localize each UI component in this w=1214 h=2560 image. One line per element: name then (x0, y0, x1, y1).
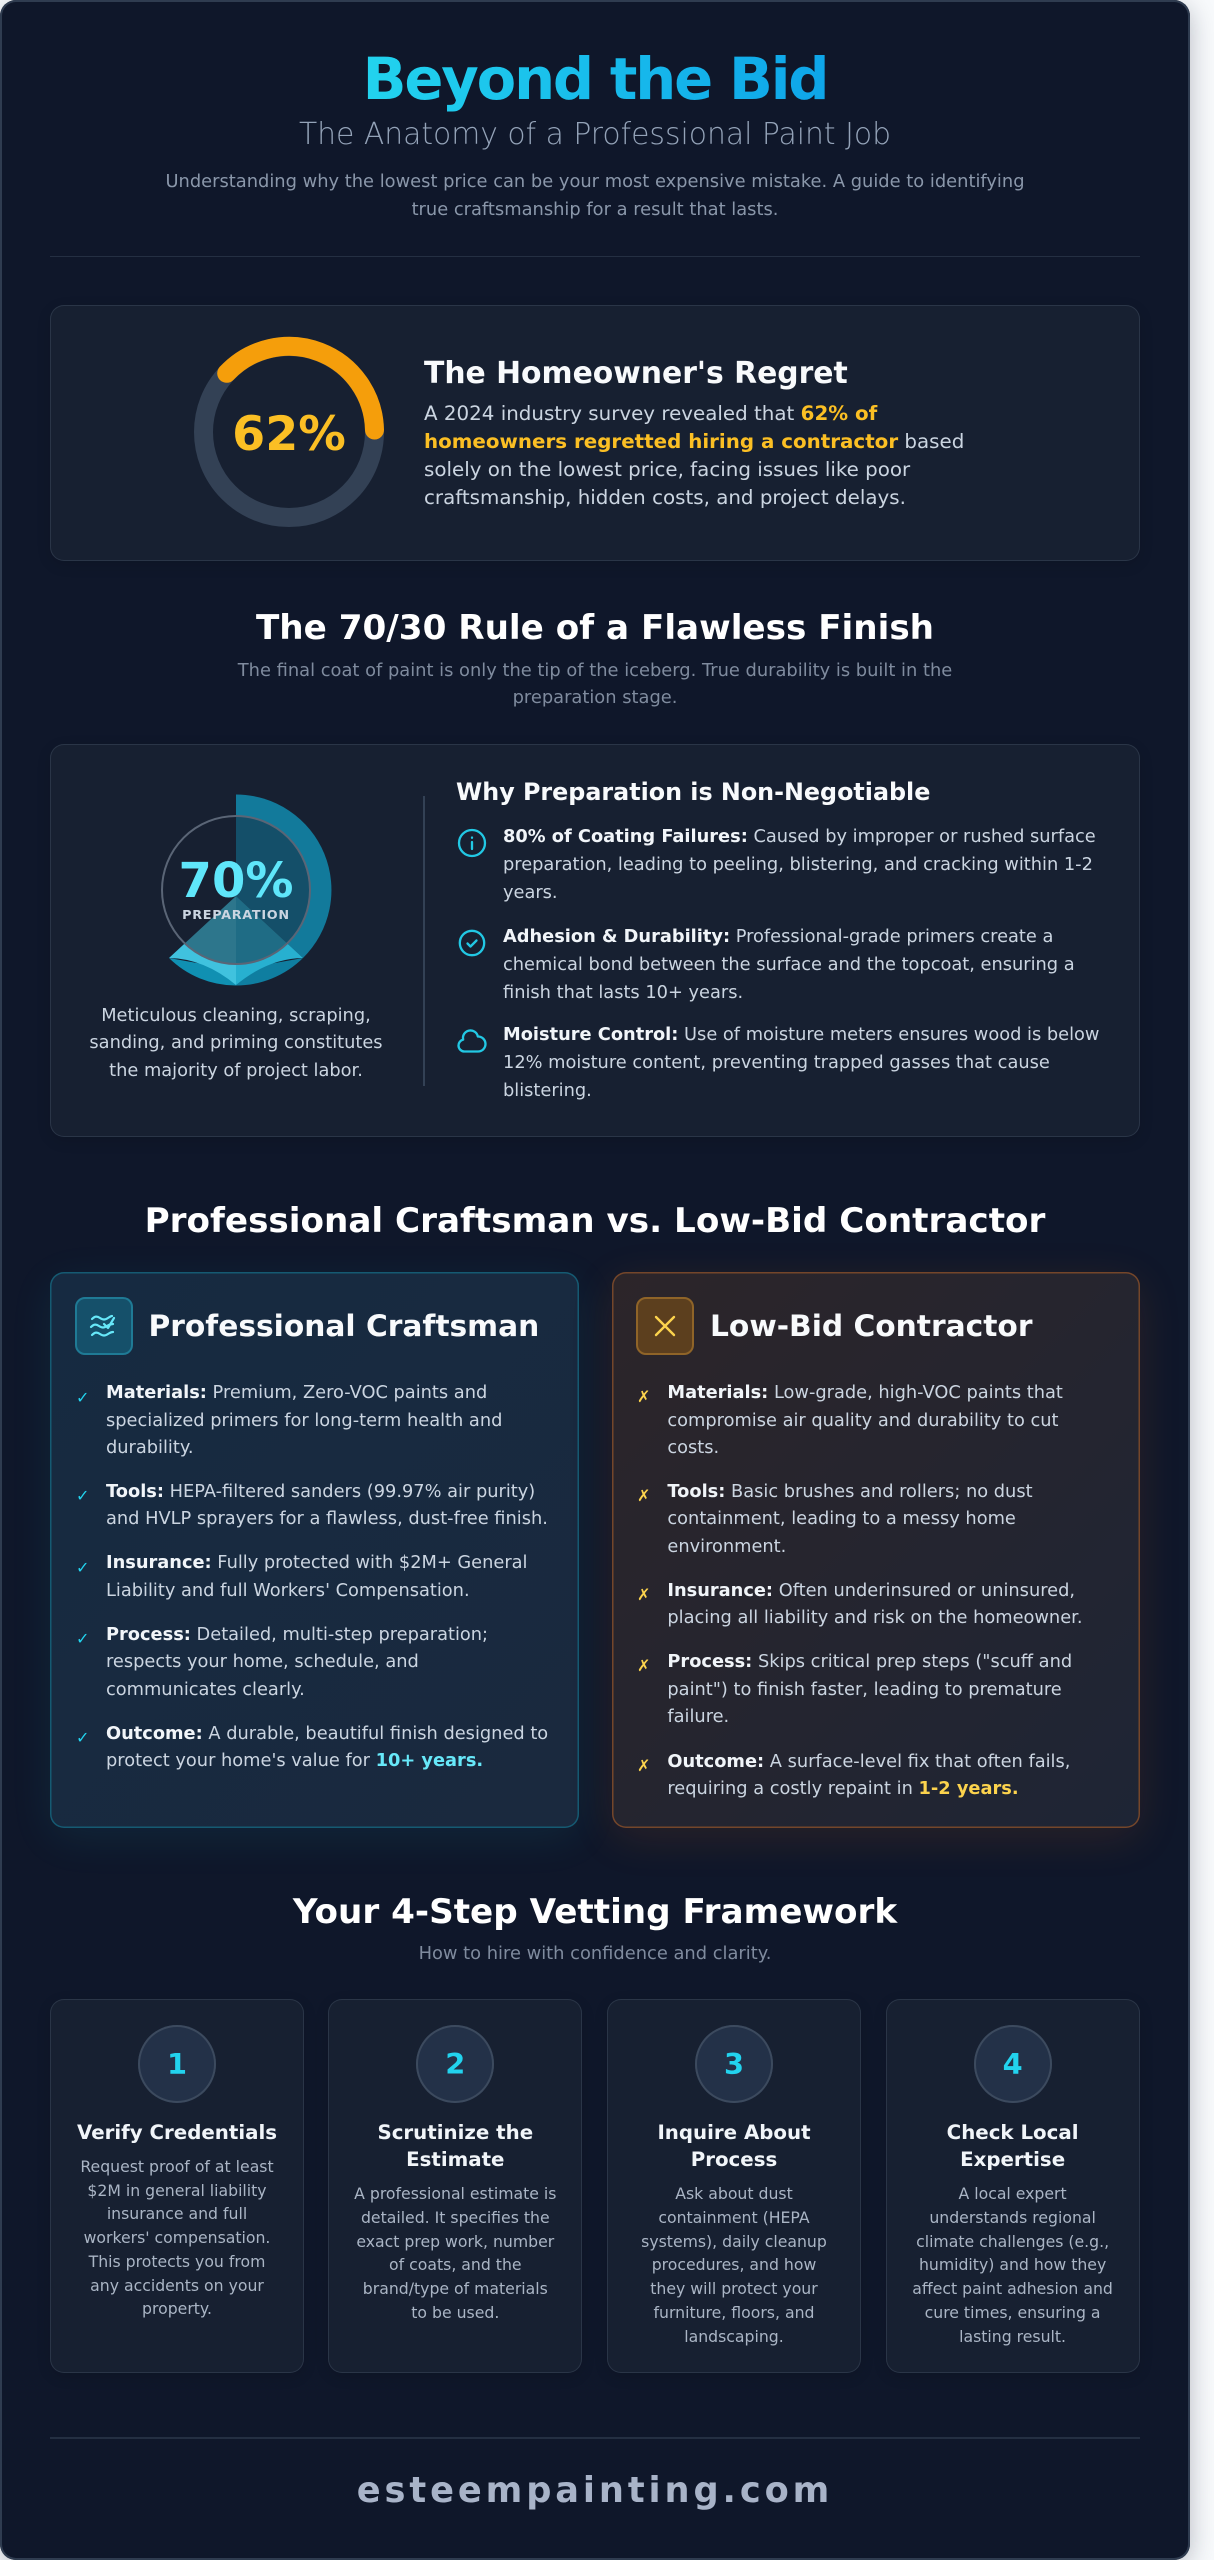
chart: 70% preparation: 70% (179, 853, 293, 909)
step text: to be used. (411, 2303, 499, 2322)
cross mark: ✗ (637, 1486, 650, 1505)
step title: Estimate (406, 2148, 504, 2171)
item: tools: containment, leading to a messy home (667, 1508, 1016, 1529)
subheading (238, 660, 952, 708)
item: outcome: Outcome: A surface-level fix that often fails, (667, 1750, 1070, 1772)
step text: A local expert (959, 2184, 1067, 2203)
step number: 3 (724, 2047, 744, 2081)
item: materials: compromise air quality and durability to cut (667, 1410, 1058, 1431)
step number (695, 2025, 773, 2103)
item: process (667, 1651, 1072, 1727)
item: tools (667, 1481, 1033, 1557)
item: process: respects your home, schedule, and (106, 1651, 419, 1672)
item: process: Process: Detailed, multi-step preparation; (106, 1624, 488, 1645)
step text: procedures, and how (652, 2255, 816, 2274)
step text: Request proof of at least (80, 2157, 274, 2176)
step card 1 (50, 1999, 304, 2373)
item: materials: costs. (667, 1437, 719, 1458)
step text: systems), daily cleanup (641, 2232, 827, 2251)
item: moisture (503, 1024, 1099, 1101)
card heading: Low-Bid Contractor (710, 1309, 1032, 1344)
donut chart: 62%: 62% (232, 407, 346, 462)
item: coating failures: 80% of Coating Failures: Caused by improper or rushed surface (503, 826, 1096, 847)
item: insurance: Liability and full Workers' Compensation. (106, 1580, 470, 1601)
step title: Inquire About (657, 2120, 811, 2144)
item: moisture: blistering. (503, 1080, 592, 1101)
header (50, 46, 1140, 257)
body text (424, 402, 964, 509)
item: outcome: protect your home's value for 10+ years. (106, 1750, 483, 1771)
step number (138, 2025, 216, 2103)
step number: 2 (445, 2047, 465, 2081)
step text: climate challenges (e.g., (916, 2232, 1109, 2251)
cross mark: ✗ (637, 1585, 650, 1604)
item: moisture: Moisture Control: Use of moisture meters ensures wood is below (503, 1024, 1099, 1045)
step text: A professional estimate is (354, 2184, 556, 2203)
chart: 70% preparation (161, 794, 332, 986)
step text: of coats, and the (389, 2255, 522, 2274)
heading: The 70/30 Rule of a Flawless Finish (256, 608, 934, 648)
step text: $2M in general liability (87, 2181, 267, 2200)
item: tools: Tools: Basic brushes and rollers; no dust (667, 1481, 1033, 1502)
step number: 1 (167, 2047, 187, 2081)
panel: homeowner's regret (50, 305, 1140, 561)
section heading: vetting framework (292, 1892, 898, 1964)
section heading: comparison: Professional Craftsman vs. Low-Bid Contractor (145, 1201, 1045, 1241)
item: process: failure. (667, 1706, 729, 1727)
subheading: How to hire with confidence and clarity. (419, 1943, 771, 1964)
section heading: 70/30 rule (238, 608, 952, 708)
intro text: true craftsmanship for a result that lasts. (412, 199, 778, 220)
intro text (165, 171, 1025, 220)
item: insurance (667, 1580, 1082, 1628)
panel: low-bid contractor (612, 1272, 1140, 1828)
list: low-bid (637, 1382, 1082, 1799)
icon: cloud (457, 1029, 487, 1053)
step text: lasting result. (959, 2327, 1066, 2346)
item: moisture: 12% moisture content, preventing trapped gasses that cause (503, 1052, 1050, 1073)
item: materials: specialized primers for long-term health and (106, 1410, 502, 1431)
chart caption: Meticulous cleaning, scraping, (101, 1005, 371, 1026)
panel: professional craftsman (50, 1272, 578, 1828)
step text (912, 2184, 1113, 2346)
body text: homeowners regretted hiring a contractor based (424, 430, 964, 453)
intro text: Understanding why the lowest price can be your most expensive mistake. A guide to identifying (165, 171, 1025, 192)
body text: craftsmanship, hidden costs, and project delays. (424, 486, 906, 509)
step text: brand/type of materials (363, 2279, 548, 2298)
item: process: paint") to finish faster, leading to premature (667, 1679, 1062, 1700)
step title (377, 2120, 533, 2171)
step text: detailed. It specifies the (361, 2208, 550, 2227)
check mark: ✓ (76, 1558, 89, 1577)
cross mark: ✗ (637, 1387, 650, 1406)
step text: affect paint adhesion and (912, 2279, 1113, 2298)
step number (416, 2025, 494, 2103)
step number (974, 2025, 1052, 2103)
step title (657, 2120, 811, 2171)
check mark: ✓ (76, 1728, 89, 1747)
step text: exact prep work, number (356, 2232, 554, 2251)
item: process (106, 1624, 488, 1700)
cross mark: ✗ (637, 1756, 650, 1774)
chart caption (89, 1005, 383, 1081)
item: insurance: Insurance: Fully protected with $2M+ General (106, 1552, 527, 1573)
item: outcome: Outcome: A durable, beautiful finish designed to (106, 1723, 548, 1744)
item: materials: Materials: Low-grade, high-VOC paints that (667, 1382, 1063, 1403)
icon: check circle (458, 930, 486, 956)
item: insurance: Insurance: Often underinsured or uninsured, (667, 1580, 1075, 1601)
item: outcome: requiring a costly repaint in 1-2 years. (667, 1778, 1019, 1799)
step card 3 (607, 1999, 861, 2373)
step text: they will protect your (650, 2279, 818, 2298)
item: coating failures: preparation, leading to peeling, blistering, and cracking within 1-2 (503, 854, 1093, 875)
step text: furniture, floors, and (654, 2303, 814, 2322)
item: insurance: placing all liability and risk on the homeowner. (667, 1607, 1082, 1628)
step text: understands regional (929, 2208, 1096, 2227)
check mark: ✓ (76, 1486, 89, 1505)
step card 2 (328, 1999, 582, 2373)
step number: 4 (1003, 2047, 1023, 2081)
subheading: preparation stage. (513, 687, 677, 708)
subtitle: The Anatomy of a Professional Paint Job (299, 117, 891, 152)
item: coating failures (503, 826, 1096, 903)
item: tools: and HVLP sprayers for a flawless, dust-free finish. (106, 1508, 548, 1529)
step text: property. (142, 2299, 212, 2318)
step text: humidity) and how they (919, 2255, 1106, 2274)
step text: landscaping. (684, 2327, 784, 2346)
item: materials: Materials: Premium, Zero-VOC paints and (106, 1382, 487, 1403)
item: tools: Tools: HEPA-filtered sanders (99.97% air purity) (106, 1481, 535, 1502)
item: tools (106, 1481, 548, 1529)
step title: Process (691, 2148, 777, 2171)
step text: containment (HEPA (658, 2208, 810, 2227)
icon: info (458, 828, 486, 858)
item: insurance (106, 1552, 527, 1601)
step text: any accidents on your (90, 2276, 264, 2295)
item: outcome (106, 1723, 548, 1771)
step title (947, 2120, 1079, 2171)
item: tools: environment. (667, 1536, 786, 1557)
step text (80, 2157, 274, 2318)
step text: insurance and full (107, 2204, 247, 2223)
cross mark: ✗ (637, 1656, 650, 1675)
body text: solely on the lowest price, facing issues like poor (424, 458, 910, 481)
step text: This protects you from (89, 2252, 265, 2271)
item: materials (106, 1382, 502, 1458)
panel: preparation (50, 744, 1140, 1137)
heading: The Homeowner's Regret (424, 356, 848, 391)
icon: x mark (636, 1297, 694, 1355)
check mark: ✓ (76, 1629, 89, 1648)
heading: Why Preparation is Non-Negotiable (456, 778, 930, 806)
chart caption: sanding, and priming constitutes (89, 1032, 383, 1053)
item: outcome (667, 1750, 1070, 1799)
footer: website: esteempainting.com (357, 2470, 833, 2511)
item: adhesion: finish that lasts 10+ years. (503, 982, 743, 1003)
body text: A 2024 industry survey revealed that 62% of (424, 402, 877, 425)
step title: Scrutinize the (377, 2120, 533, 2144)
item: adhesion (503, 926, 1075, 1003)
step title: Expertise (960, 2148, 1065, 2171)
step text: workers' compensation. (84, 2228, 270, 2247)
item: adhesion: Adhesion & Durability: Professional-grade primers create a (503, 926, 1053, 947)
check mark: ✓ (76, 1388, 89, 1407)
item: process: Process: Skips critical prep steps ("scuff and (667, 1651, 1072, 1672)
step text: Ask about dust (675, 2184, 793, 2203)
card heading: Professional Craftsman (148, 1309, 539, 1344)
item: coating failures: years. (503, 882, 558, 903)
chart caption: the majority of project labor. (109, 1060, 363, 1081)
item: process: communicates clearly. (106, 1679, 305, 1700)
icon: brush waves (75, 1297, 133, 1355)
donut chart: 62% (194, 336, 384, 527)
item: materials: durability. (106, 1437, 193, 1458)
step card 4 (886, 1999, 1140, 2373)
item: adhesion: chemical bond between the surface and the topcoat, ensuring a (503, 954, 1075, 975)
subheading: The final coat of paint is only the tip of the iceberg. True durability is built in the (238, 660, 952, 681)
step title: Verify Credentials (77, 2120, 277, 2144)
chart: 70% preparation: PREPARATION (182, 908, 290, 923)
item: materials (667, 1382, 1063, 1458)
title: Beyond the Bid (363, 46, 827, 113)
list: professional (76, 1382, 548, 1771)
step text (354, 2184, 556, 2322)
step text (641, 2184, 827, 2346)
heading: Your 4-Step Vetting Framework (293, 1892, 897, 1932)
step text: cure times, ensuring a (925, 2303, 1101, 2322)
step title: Check Local (947, 2120, 1079, 2144)
